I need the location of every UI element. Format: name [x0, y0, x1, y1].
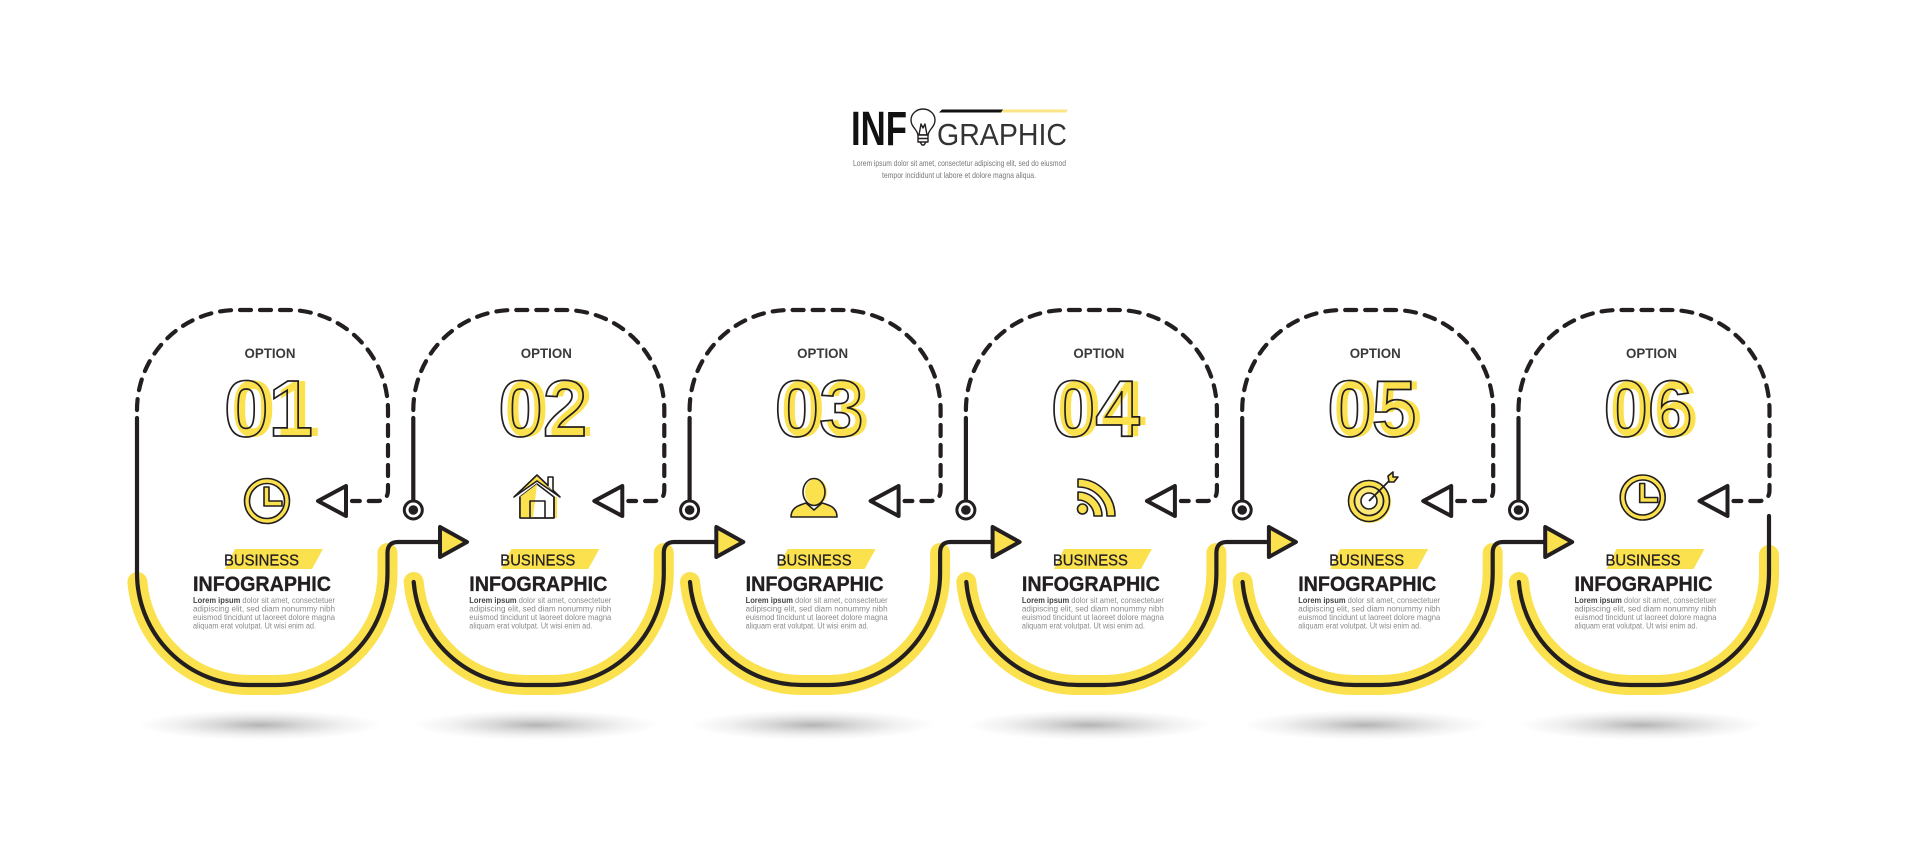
body text: adipiscing elit, sed diam nonummy nibh [193, 604, 335, 614]
stem with node [1233, 418, 1251, 519]
business tag [1053, 549, 1152, 570]
arrow: back [1147, 486, 1175, 516]
floor shadow [967, 710, 1211, 740]
panel: option 03 [681, 310, 1020, 740]
panel: option 04 [957, 310, 1296, 740]
floor shadow [414, 710, 658, 740]
dashed outline with back arrow line [966, 310, 1217, 501]
arrow: forward [993, 527, 1020, 557]
stem with node [404, 418, 422, 519]
body text: Lorem ipsum dolor sit amet, consectetuer [1022, 596, 1164, 605]
dashed outline with back arrow line [413, 310, 664, 501]
solid outline [690, 542, 993, 685]
body text: euismod tincidunt ut laoreet dolore magna [1022, 613, 1164, 622]
body text: adipiscing elit, sed diam nonummy nibh [469, 604, 611, 614]
arrow: forward [716, 527, 743, 557]
title: GRAPHIC [937, 117, 1067, 152]
solid outline [1243, 542, 1545, 685]
floor shadow [1520, 710, 1764, 740]
panel: option 05 [1233, 310, 1572, 740]
floor shadow [691, 710, 935, 740]
arrow: back [1700, 486, 1728, 516]
heading: INFOGRAPHIC [1574, 573, 1712, 596]
body text: euismod tincidunt ut laoreet dolore magna [193, 613, 336, 622]
body text: Lorem ipsum dolor sit amet, consectetuer [469, 596, 612, 605]
business tag [224, 549, 323, 570]
body text: adipiscing elit, sed diam nonummy nibh [1574, 604, 1716, 614]
body text: aliquam erat volutpat. Ut wisi enim ad. [746, 622, 869, 630]
panel: option 02 [404, 310, 743, 740]
body text [1574, 596, 1717, 630]
icon: signal waves [1078, 479, 1115, 516]
title accent bar [939, 110, 1068, 112]
icon: light bulb [911, 109, 935, 145]
yellow band [137, 553, 388, 685]
label: option: OPTION [1073, 345, 1124, 361]
arrow: back [594, 486, 622, 516]
solid outline [414, 542, 716, 685]
body text: Lorem ipsum dolor sit amet, consectetuer [1574, 596, 1717, 605]
stem with node [1510, 418, 1528, 519]
arrow: back [871, 486, 899, 516]
number 01: 01 [231, 364, 320, 453]
number 02: 02 [504, 364, 593, 453]
body text: aliquam erat volutpat. Ut wisi enim ad. [1298, 622, 1421, 630]
body text: euismod tincidunt ut laoreet dolore magna [1298, 613, 1441, 622]
arrow: back [1423, 486, 1451, 516]
business tag: BUSINESS [500, 552, 575, 570]
body text: aliquam erat volutpat. Ut wisi enim ad. [1022, 622, 1145, 630]
body text: Lorem ipsum dolor sit amet, consectetuer [1298, 596, 1441, 605]
number 05: 05 [1333, 364, 1422, 453]
number 01: 01 [224, 364, 313, 453]
business tag [500, 549, 599, 570]
heading: INFOGRAPHIC [1298, 573, 1436, 596]
heading: INFOGRAPHIC [193, 573, 331, 596]
business tag: BUSINESS [777, 552, 852, 570]
icon: person [791, 478, 837, 517]
body text: euismod tincidunt ut laoreet dolore magna [469, 613, 612, 622]
yellow band [1519, 555, 1769, 685]
business tag: BUSINESS [1606, 552, 1680, 570]
body text: aliquam erat volutpat. Ut wisi enim ad. [469, 622, 592, 630]
icon: house [514, 475, 560, 518]
arrow: forward [1545, 527, 1572, 557]
subtitle [853, 158, 1066, 180]
dashed outline with back arrow line [690, 310, 941, 501]
label: option: OPTION [1626, 345, 1677, 361]
icon: clock [1620, 475, 1665, 520]
label: option: OPTION [521, 345, 572, 361]
body text [1298, 596, 1441, 630]
number 05: 05 [1327, 364, 1416, 453]
number 04: 04 [1051, 364, 1140, 453]
business tag [1329, 549, 1428, 570]
dashed outline with back arrow line [1518, 310, 1770, 501]
panel: option 06 [1510, 310, 1770, 740]
body text: euismod tincidunt ut laoreet dolore magna [746, 613, 888, 622]
solid outline [137, 418, 440, 685]
yellow band [414, 553, 664, 685]
number 06: 06 [1610, 364, 1698, 453]
heading: INFOGRAPHIC [746, 573, 884, 596]
panel: option 01 [137, 310, 467, 740]
business tag: BUSINESS [1329, 552, 1404, 570]
dashed outline with back arrow line [1242, 310, 1493, 501]
arrow: forward [440, 527, 467, 557]
number 03: 03 [781, 364, 870, 453]
title: INF [851, 103, 907, 156]
body text: adipiscing elit, sed diam nonummy nibh [1298, 604, 1440, 614]
subtitle: tempor incididunt ut labore et dolore magna aliqua. [882, 170, 1036, 180]
heading: INFOGRAPHIC [1022, 573, 1160, 596]
icon: target [1348, 472, 1398, 523]
label: option: OPTION [244, 345, 296, 361]
arrow: forward [1269, 527, 1296, 557]
body text: adipiscing elit, sed diam nonummy nibh [746, 604, 888, 614]
stem with node [957, 418, 975, 519]
label: option: OPTION [797, 345, 848, 361]
number 04: 04 [1057, 364, 1146, 453]
business tag [777, 549, 876, 570]
body text [1022, 596, 1164, 630]
body text: aliquam erat volutpat. Ut wisi enim ad. [193, 622, 316, 630]
body text: euismod tincidunt ut laoreet dolore magna [1574, 613, 1717, 622]
body text [469, 596, 612, 630]
yellow band [690, 553, 940, 685]
title [851, 103, 1068, 156]
yellow band [966, 553, 1216, 685]
body text: aliquam erat volutpat. Ut wisi enim ad. [1574, 622, 1698, 630]
body text [746, 596, 888, 630]
number 03: 03 [775, 364, 864, 453]
arrow: back [318, 486, 346, 516]
business tag: BUSINESS [224, 552, 299, 570]
number 02: 02 [498, 364, 587, 453]
yellow band [1243, 553, 1493, 685]
business tag: BUSINESS [1053, 552, 1128, 570]
business tag [1606, 549, 1704, 570]
number 06: 06 [1604, 364, 1692, 453]
dashed outline with back arrow line [137, 310, 388, 501]
body text [193, 596, 336, 630]
heading: INFOGRAPHIC [469, 573, 607, 596]
label: option: OPTION [1350, 345, 1401, 361]
floor shadow [1243, 710, 1487, 740]
body text: adipiscing elit, sed diam nonummy nibh [1022, 604, 1164, 614]
icon: clock [244, 478, 290, 524]
solid outline [966, 542, 1269, 685]
body text: Lorem ipsum dolor sit amet, consectetuer [746, 596, 888, 605]
subtitle: Lorem ipsum dolor sit amet, consectetur adipiscing elit, sed do eiusmod [853, 158, 1066, 168]
solid outline [1519, 516, 1769, 685]
floor shadow [138, 710, 382, 740]
body text: Lorem ipsum dolor sit amet, consectetuer [193, 596, 335, 605]
stem with node [681, 418, 699, 519]
